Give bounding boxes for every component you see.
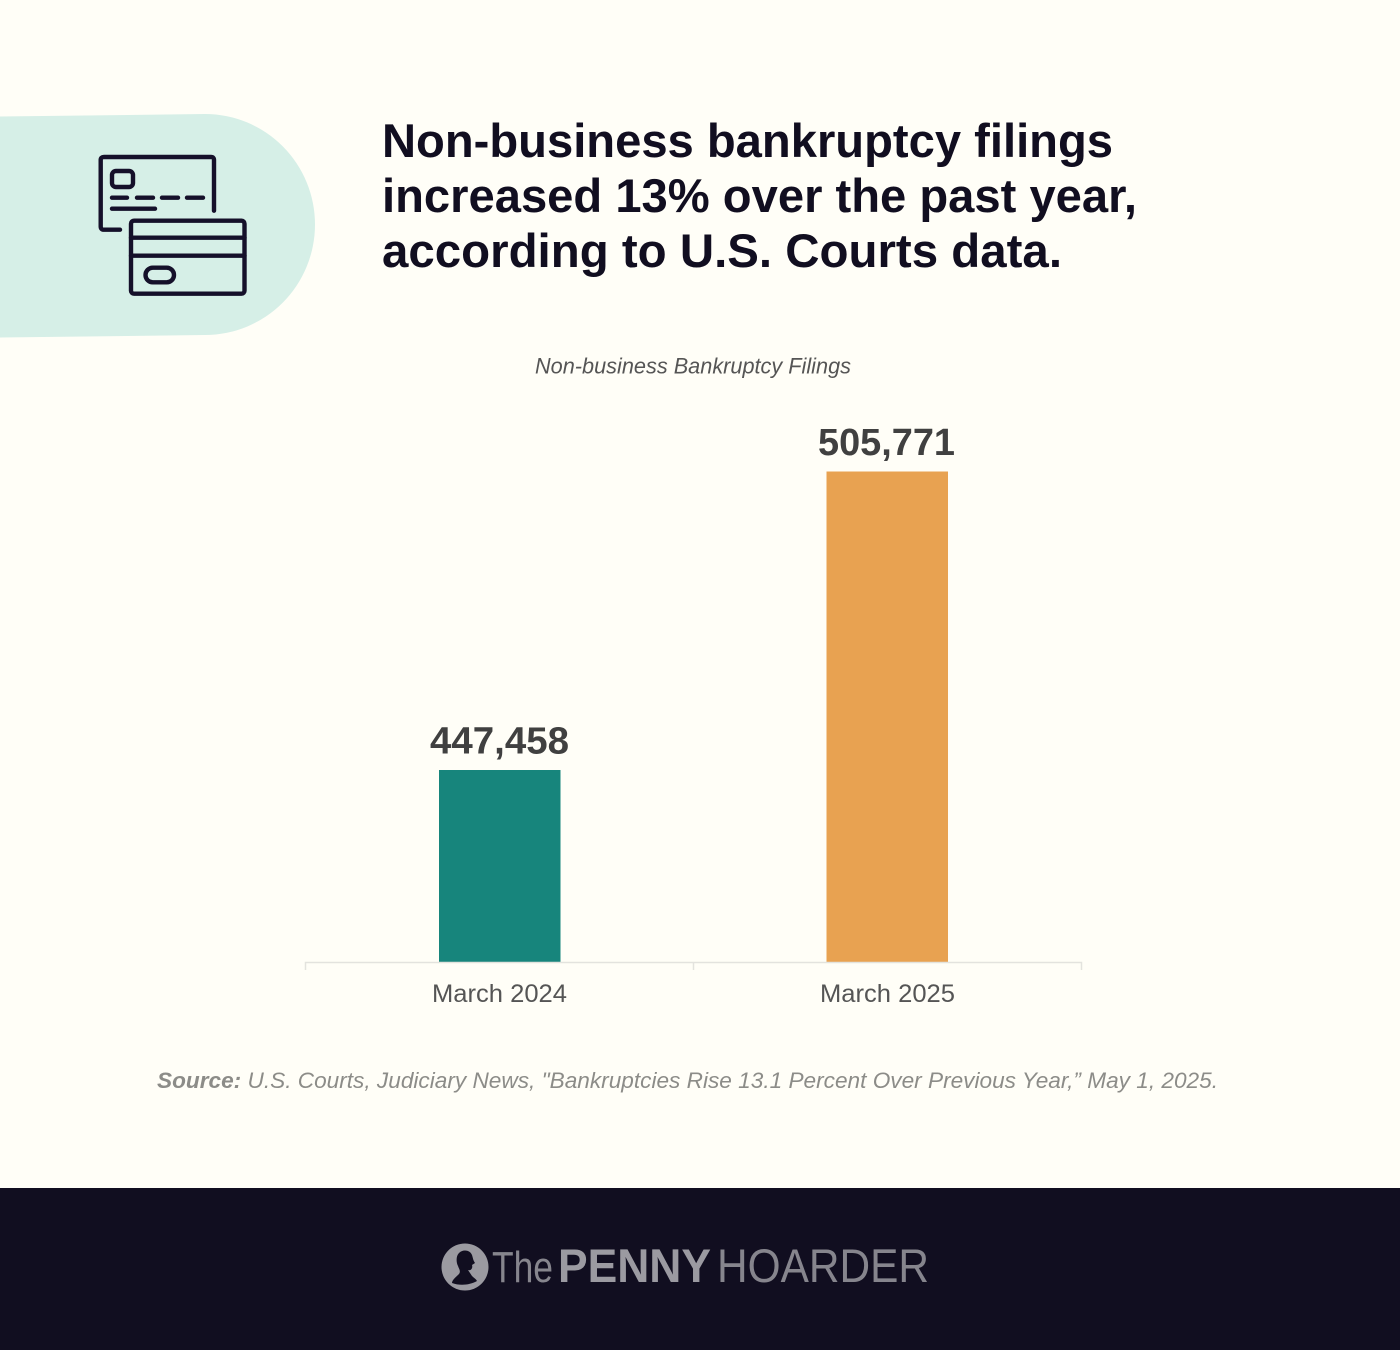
- logo: The: [492, 1243, 553, 1292]
- x axis: [306, 962, 1082, 1008]
- bar: March 2025: 505,771: [818, 422, 955, 464]
- header icon badge: [0, 114, 315, 338]
- x axis: March 2025: [820, 980, 955, 1008]
- logo: PENNY: [558, 1239, 711, 1292]
- source note: Source: U.S. Courts, Judiciary News, "Bankruptcies Rise 13.1 Percent Over Previous Year,” May 1, 2025.: [157, 1068, 1218, 1093]
- bar: March 2024: [430, 720, 569, 962]
- icon: penny silhouette: [442, 1244, 488, 1290]
- x axis: March 2024: [432, 980, 567, 1008]
- bar: March 2024: 447,458: [430, 720, 569, 762]
- bar chart: [306, 354, 1082, 1008]
- title: Non-business bankruptcy filings: [382, 114, 1113, 167]
- icon: credit cards: [101, 157, 244, 294]
- mint badge shape: [0, 114, 315, 338]
- title: increased 13% over the past year,: [382, 169, 1137, 222]
- title: [382, 114, 1137, 277]
- footer band: [0, 1188, 1400, 1350]
- logo: HOARDER: [717, 1239, 929, 1292]
- logo: [442, 1239, 929, 1292]
- chart title: Non-business Bankruptcy Filings: [535, 354, 851, 378]
- bar: March 2025: [818, 422, 955, 962]
- title: according to U.S. Courts data.: [382, 224, 1062, 277]
